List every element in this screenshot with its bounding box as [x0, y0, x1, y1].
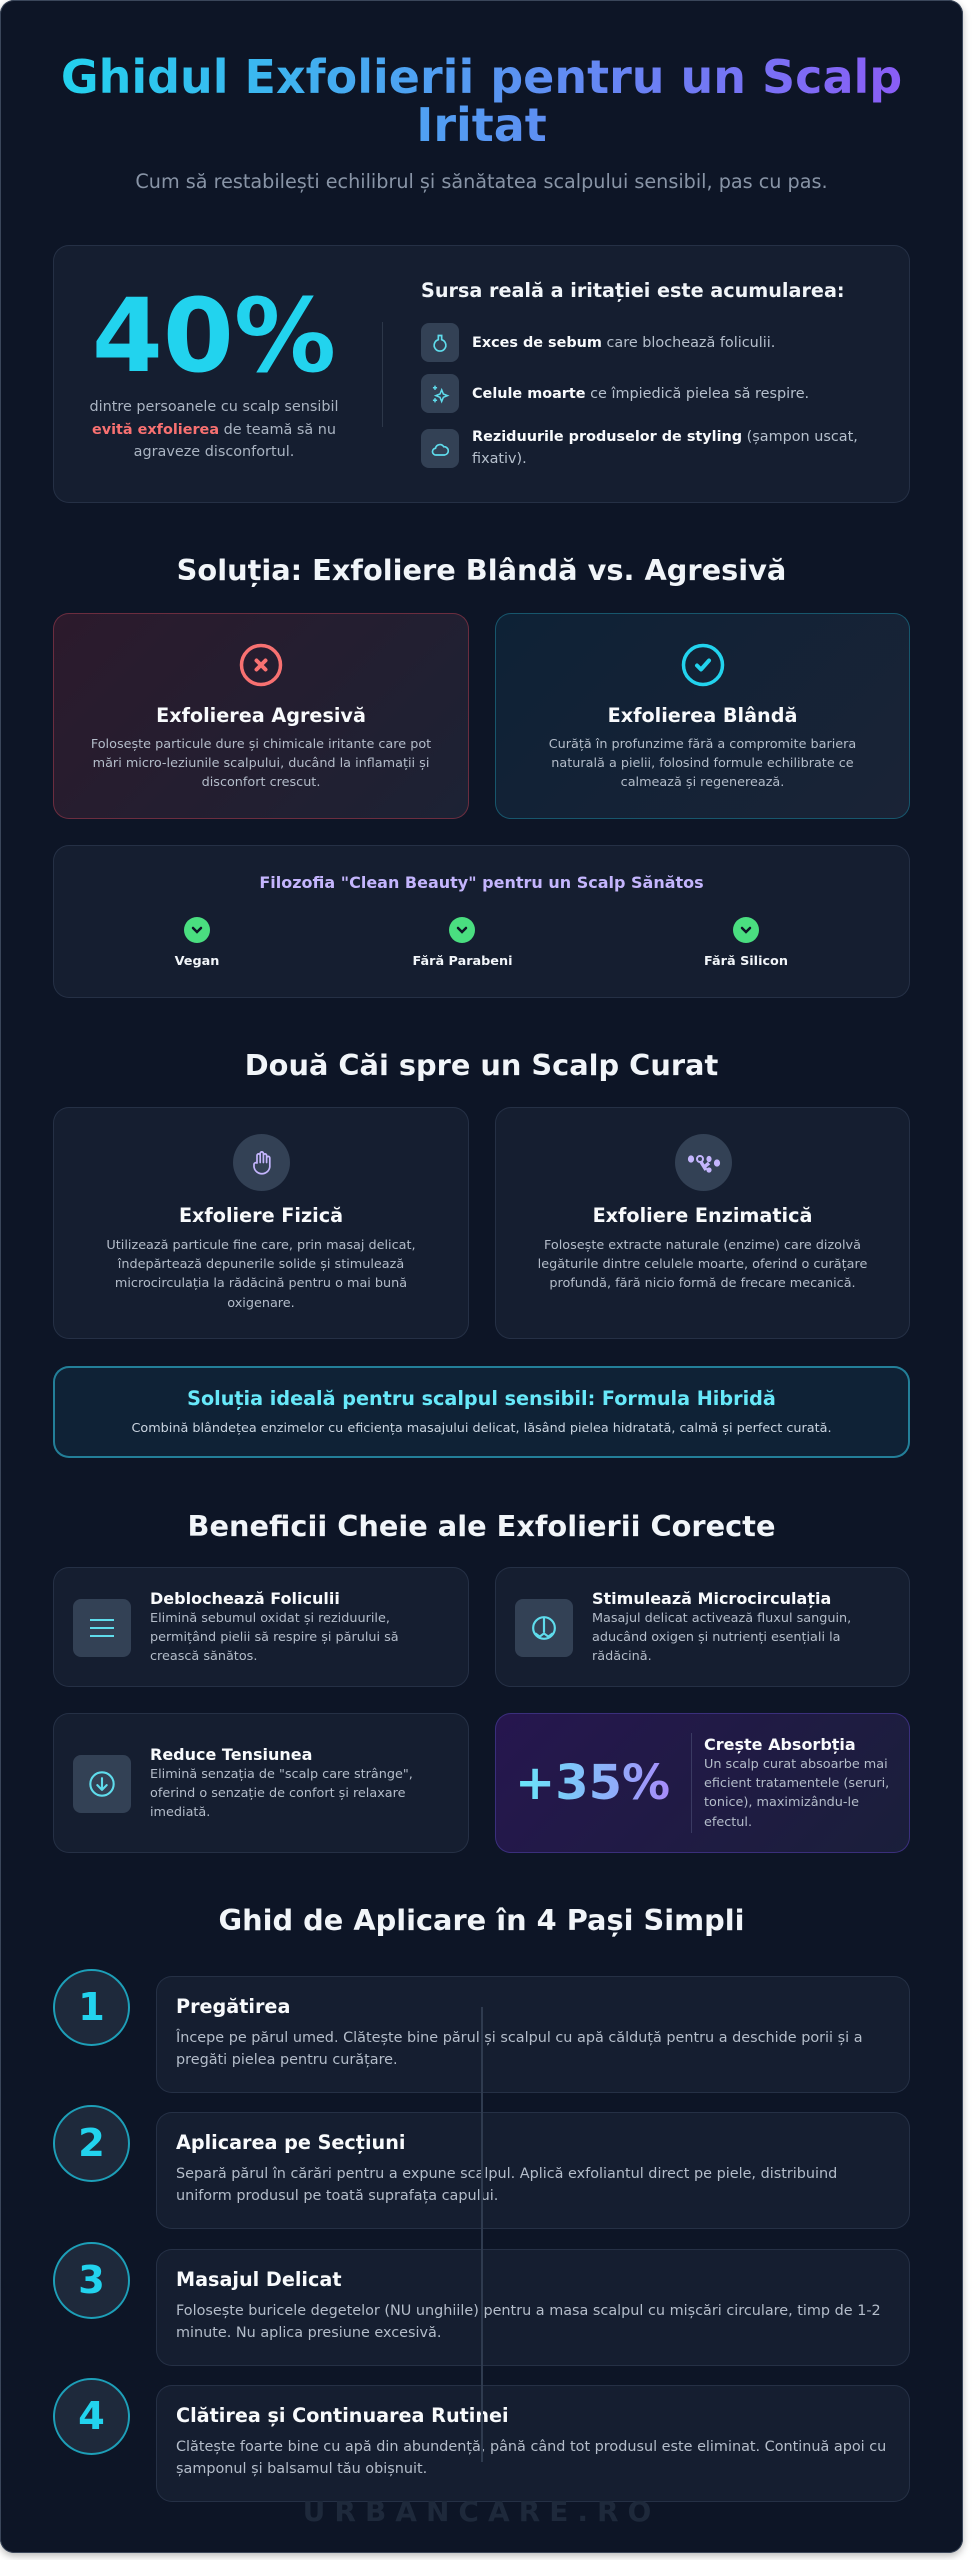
stat description: dintre persoanele cu scalp sensibil: [90, 399, 338, 415]
benefit text: permițând pielii să respire și părului să: [150, 1630, 399, 1645]
stat description: agraveze disconfortul.: [134, 444, 294, 460]
benefit title: Stimulează Microcirculația: [592, 1589, 831, 1608]
big stat: 40%: 40%: [92, 277, 336, 396]
stat description: evită exfolierea de teamă să nu: [92, 422, 336, 438]
card text: mări micro-leziunile scalpului, ducând la inflamații și: [93, 756, 429, 771]
card text: [91, 737, 431, 790]
item: no parabens: [412, 917, 512, 969]
icon: circulation: [515, 1599, 573, 1657]
benefit text: Elimină sebumul oxidat și reziduurile,: [150, 1611, 390, 1626]
step text: [176, 2166, 837, 2204]
card text: Folosește extracte naturale (enzime) care dizolvă: [544, 1238, 861, 1253]
step title: Masajul Delicat: [176, 2268, 342, 2290]
cause: styling residue: [472, 429, 858, 467]
number badge: [53, 1969, 130, 2046]
step 4: [53, 2378, 910, 2502]
icon: cloud: [421, 429, 459, 468]
icon: enzymes: [675, 1134, 732, 1191]
benefit text: oferind o senzație de confort și relaxare: [150, 1786, 405, 1801]
card text: Utilizează particule fine care, prin masaj delicat,: [106, 1238, 416, 1253]
number badge: 1: [78, 1985, 105, 2030]
panel: clean beauty: [53, 845, 910, 998]
step text: [176, 2438, 886, 2477]
benefit text: [150, 1611, 399, 1664]
card text: legăturile dintre celulele moarte, oferind o curățare: [538, 1257, 867, 1272]
icon: arrow down circle: [73, 1755, 131, 1813]
benefit text: [704, 1757, 889, 1830]
card text: naturală a pielii, folosind formule echilibrate ce: [551, 756, 854, 771]
card title: Exfoliere Enzimatică: [593, 1204, 812, 1227]
number badge: 4: [78, 2394, 105, 2439]
step 2: [53, 2105, 910, 2229]
card text: calmează și regenerează.: [621, 775, 784, 790]
cause: styling residue: fixativ).: [472, 451, 527, 467]
panel: enzymatic exfoliation: [495, 1107, 910, 1339]
cause: styling residue: Reziduurile produselor de styling (șampon uscat,: [472, 429, 858, 445]
benefit text: Masajul delicat activează fluxul sanguin,: [592, 1611, 851, 1626]
panel: gentle exfoliation: [495, 613, 910, 819]
step text: [176, 2302, 881, 2341]
item: vegan: Vegan: [175, 954, 219, 969]
panel: reduces tension: [53, 1713, 469, 1853]
step card: [156, 2384, 910, 2502]
panel: unblocks follicles: [53, 1567, 469, 1687]
benefit title: Crește Absorbția: [704, 1735, 856, 1754]
clean beauty heading: Filozofia "Clean Beauty" pentru un Scalp Sănătos: [259, 873, 704, 892]
benefit text: [150, 1767, 413, 1820]
card text: [106, 1238, 416, 1311]
heading: two paths: Două Căi spre un Scalp Curat: [245, 1048, 718, 1082]
callout title: Soluția ideală pentru scalpul sensibil: Formula Hibridă: [187, 1387, 776, 1410]
card text: microcirculația la rădăcină pentru o mai bună: [115, 1276, 407, 1291]
card title: Exfolierea Blândă: [608, 704, 797, 727]
step text: Folosește buricele degetelor (NU unghiile) pentru a masa scalpul cu mișcări circulare, timp de 1-2: [176, 2302, 881, 2318]
step card: [156, 1976, 910, 2093]
number badge: [53, 2105, 130, 2182]
card text: Folosește particule dure și chimicale iritante care pot: [91, 737, 431, 752]
step text: uniform produsul pe toată suprafața capului.: [176, 2188, 498, 2204]
card text: Curăță în profunzime fără a compromite bariera: [549, 737, 856, 752]
benefit text: aducând oxigen și nutrienți esențiali la: [592, 1630, 840, 1645]
subtitle: Cum să restabilești echilibrul și sănătatea scalpului sensibil, pas cu pas.: [135, 170, 828, 193]
heading: solution: Soluția: Exfoliere Blândă vs. Agresivă: [177, 553, 786, 587]
benefit text: Un scalp curat absoarbe mai: [704, 1757, 888, 1772]
icon: lines: [73, 1599, 131, 1657]
benefit text: eficient tratamentele (seruri,: [704, 1776, 889, 1791]
number badge: 3: [78, 2258, 105, 2303]
benefit text: Elimină senzația de "scalp care strânge",: [150, 1767, 413, 1782]
big stat: +35%: +35%: [515, 1755, 670, 1811]
icon: check circle: [682, 644, 724, 686]
step text: Separă părul în cărări pentru a expune scalpul. Aplică exfoliantul direct pe piele, distribuind: [176, 2166, 837, 2182]
step card: [156, 2248, 910, 2366]
cause: dead cells: Celule moarte ce împiedică pielea să respire.: [472, 386, 809, 402]
item: no parabens: Fără Parabeni: [412, 954, 512, 969]
number badge: [53, 2378, 130, 2455]
watermark: URBANCARE.RO: [303, 2495, 660, 2528]
panel: increases absorption: [495, 1713, 910, 1853]
card text: [549, 737, 856, 790]
stat description: [90, 399, 338, 460]
card text: îndepărtează depunerile solide și stimulează: [118, 1257, 404, 1272]
benefit title: Deblochează Foliculii: [150, 1589, 340, 1608]
icon: x circle: [240, 644, 282, 686]
step text: șamponul și balsamul tău obișnuit.: [176, 2461, 427, 2477]
step 3: [53, 2242, 910, 2366]
panel: 40% statistic and causes: [53, 245, 910, 503]
causes heading: Sursa reală a iritației este acumularea:: [421, 279, 845, 302]
number badge: [53, 2242, 130, 2319]
step text: Începe pe părul umed. Clătește bine părul și scalpul cu apă călduță pentru a deschide porii și a: [176, 2030, 863, 2046]
title: Ghidul Exfolierii pentru un Scalp Iritat: [61, 50, 902, 152]
benefit text: tonice), maximizându-le: [704, 1795, 859, 1810]
step title: Clătirea și Continuarea Rutinei: [176, 2404, 509, 2426]
heading: steps: Ghid de Aplicare în 4 Pași Simpli: [219, 1903, 744, 1937]
item: no silicone: [704, 917, 788, 969]
item: no silicone: Fără Silicon: [704, 954, 788, 969]
step title: Pregătirea: [176, 1994, 290, 2018]
benefit text: crească sănătos.: [150, 1649, 257, 1664]
benefit text: efectul.: [704, 1815, 752, 1830]
card text: disconfort crescut.: [202, 775, 320, 790]
callout text: Combină blândețea enzimelor cu eficiența masajului delicat, lăsând pielea hidratată, calmă și perfect curată.: [131, 1421, 832, 1436]
step text: [176, 2028, 863, 2068]
benefit text: rădăcină.: [592, 1649, 652, 1664]
item: vegan: [174, 917, 219, 969]
step card: [156, 2112, 910, 2229]
card title: Exfoliere Fizică: [179, 1204, 343, 1227]
benefit text: imediată.: [150, 1805, 210, 1820]
step text: minute. Nu aplica presiune excesivă.: [176, 2325, 441, 2341]
panel: stimulates microcirculation: [495, 1567, 910, 1687]
step text: pregăti pielea pentru curățare.: [176, 2052, 398, 2068]
benefit title: Reduce Tensiunea: [150, 1745, 312, 1764]
icon: hand: [233, 1134, 290, 1191]
card title: Exfolierea Agresivă: [156, 704, 366, 727]
card text: profundă, fără nicio formă de frecare mecanică.: [549, 1276, 856, 1291]
step text: Clătește foarte bine cu apă din abundență, până când tot produsul este eliminat. Continuă apoi cu: [176, 2438, 886, 2454]
callout: hybrid formula: [53, 1366, 910, 1458]
panel: physical exfoliation: [53, 1107, 469, 1339]
card text: oxigenare.: [227, 1296, 295, 1311]
icon: sparkles: [421, 374, 459, 413]
panel: aggressive exfoliation: [53, 613, 469, 819]
step 1: [53, 1969, 910, 2093]
number badge: 2: [78, 2121, 105, 2166]
step title: Aplicarea pe Secțiuni: [176, 2130, 405, 2154]
heading: benefits: Beneficii Cheie ale Exfolierii Corecte: [188, 1509, 775, 1543]
cause: sebum: Exces de sebum care blochează foliculii.: [472, 335, 775, 351]
icon: sebum: [421, 323, 459, 362]
benefit text: [592, 1611, 851, 1664]
card text: [538, 1238, 867, 1291]
